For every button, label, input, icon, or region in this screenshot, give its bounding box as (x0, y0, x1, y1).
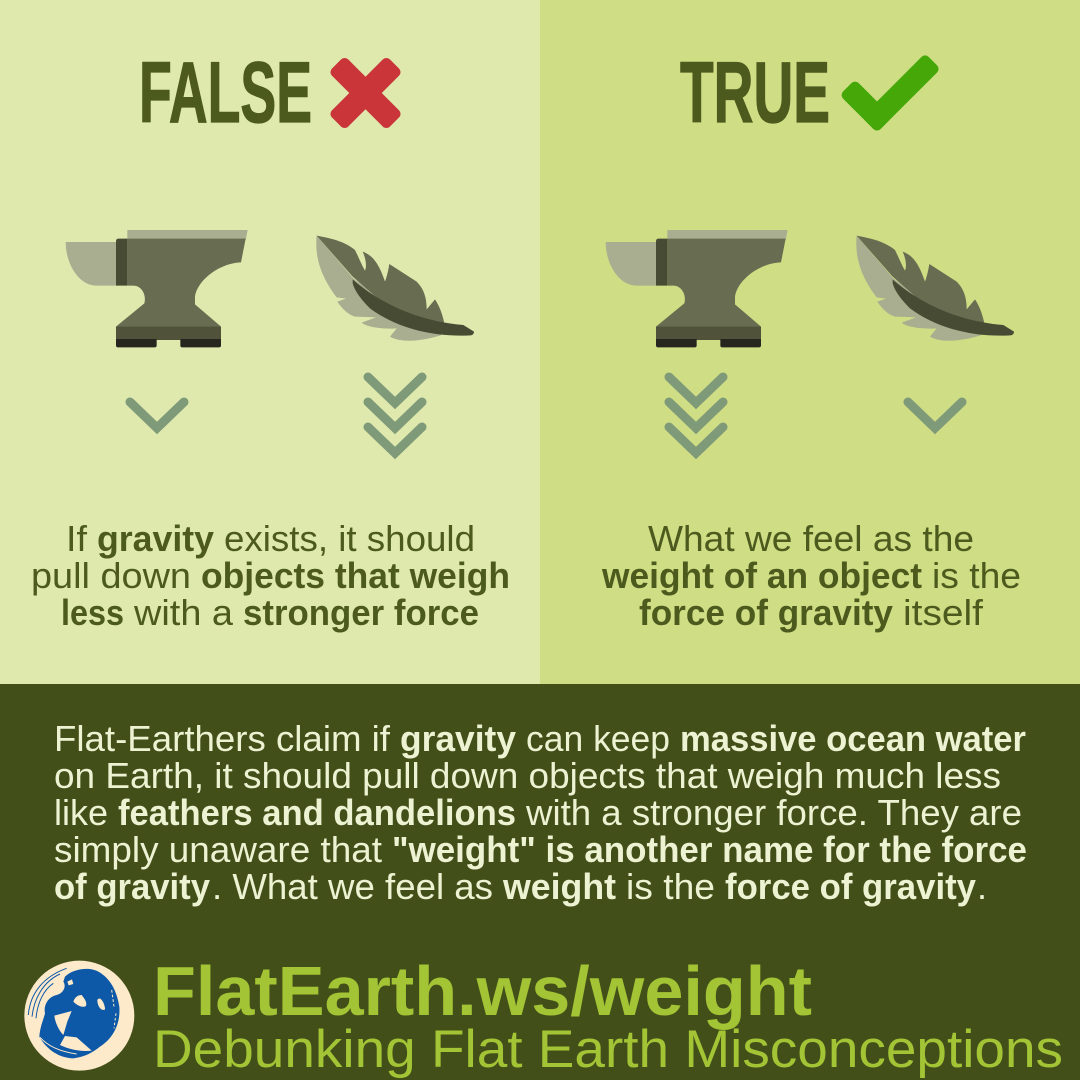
text block: explanation: . (977, 866, 987, 907)
text block: true statement: is the (932, 555, 1021, 596)
panel: explanation and footer background (0, 684, 1080, 1080)
text block: true statement: itself (903, 592, 984, 633)
text block: false claim: If (66, 518, 88, 559)
icon: red cross (308, 35, 423, 151)
text block: explanation (54, 718, 1027, 907)
text block: explanation: . What we feel as (212, 866, 493, 907)
text block: explanation: with a stronger force. They are (525, 792, 1022, 833)
text block: true statement: weight of an object (601, 555, 922, 596)
arrow: triple chevron under anvil, true panel (669, 377, 723, 453)
text block: false claim: with a (133, 592, 234, 633)
text block: explanation: Flat-Earthers claim if (54, 718, 391, 759)
text block: true statement: force of gravity (639, 592, 893, 633)
footer: site address: FlatEarth.ws/weight (153, 952, 812, 1030)
text block: false claim: pull down (31, 555, 191, 596)
text block: false claim: exists, it should (224, 518, 475, 559)
icon: green check (840, 31, 941, 133)
text block: explanation: is the (626, 866, 715, 907)
arrow: single chevron under feather, true panel (908, 402, 962, 428)
text block: false claim (31, 518, 510, 633)
text block: explanation: massive ocean water (680, 718, 1026, 759)
text block: false claim: stronger force (243, 592, 479, 633)
text block: false claim: gravity (97, 518, 214, 559)
arrow: single chevron under anvil, false panel (130, 402, 184, 428)
text block: true statement: What we feel as the (648, 518, 974, 559)
icon: anvil, true panel (606, 230, 788, 347)
text block: explanation: gravity (400, 718, 516, 759)
text block: explanation: simply unaware that (54, 829, 382, 870)
heading: FALSE: FALSE (139, 45, 312, 141)
text block: false claim: less (61, 592, 124, 633)
heading: TRUE: TRUE (680, 45, 830, 141)
icon: feather, false panel (316, 236, 474, 341)
icon: globe logo (24, 961, 134, 1071)
footer: tagline: Debunking Flat Earth Misconceptions (153, 1020, 1063, 1079)
panel: false background (0, 0, 540, 684)
text block: true statement (601, 518, 1021, 633)
text block: explanation: feathers and dandelions (118, 792, 516, 833)
panel: true background (540, 0, 1080, 684)
icon: feather, true panel (856, 236, 1014, 341)
text block: false claim: objects that weigh (201, 555, 510, 596)
arrow: triple chevron under feather, false panel (368, 377, 422, 453)
text block: explanation: like (54, 792, 108, 833)
text block: explanation: weight (502, 866, 616, 907)
text block: explanation: force of gravity (725, 866, 976, 907)
text block: explanation: on Earth, it should pull down objects that weigh much less (54, 755, 1001, 796)
text block: explanation: of gravity (54, 866, 210, 907)
text block: explanation: "weight" is another name for the force (392, 829, 1027, 870)
text block: explanation: can keep (526, 718, 670, 759)
icon: anvil, false panel (66, 230, 248, 347)
